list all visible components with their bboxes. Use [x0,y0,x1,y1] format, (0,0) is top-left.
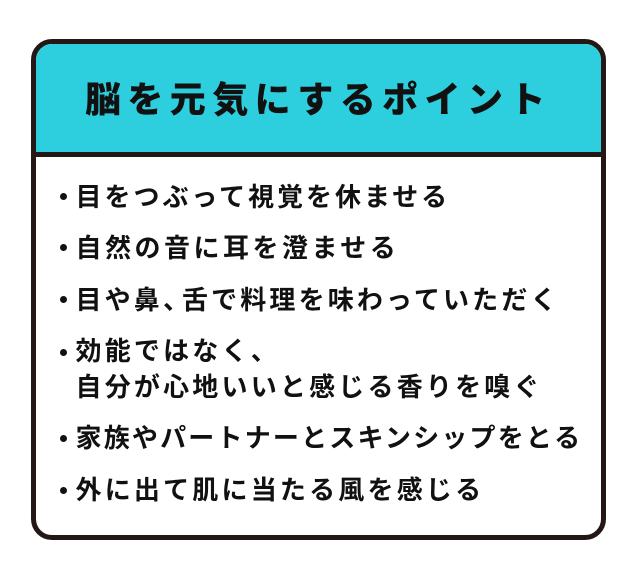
text: item 2: 自然の音に耳を澄ませる [76,233,399,263]
bullet 5 [60,435,67,442]
panel: card [31,39,606,540]
bullet 2 [60,244,67,251]
bullet 4 [60,349,67,356]
text: item 4: 効能ではなく、 自分が心地いいと感じる香りを嗅ぐ [76,336,543,402]
header band [36,44,601,156]
bullet 3 [60,296,67,303]
text: item 5: 家族やパートナーとスキンシップをとる [76,423,582,453]
text: item 6: 外に出て肌に当たる風を感じる [76,475,484,505]
bullet 6 [60,487,67,494]
bullet 1 [60,193,67,200]
title: 脳を元気にするポイント [85,79,552,120]
text: item 1: 目をつぶって視覚を休ませる [76,182,450,212]
text: item 3: 目や鼻、舌で料理を味わっていただく [76,285,560,315]
